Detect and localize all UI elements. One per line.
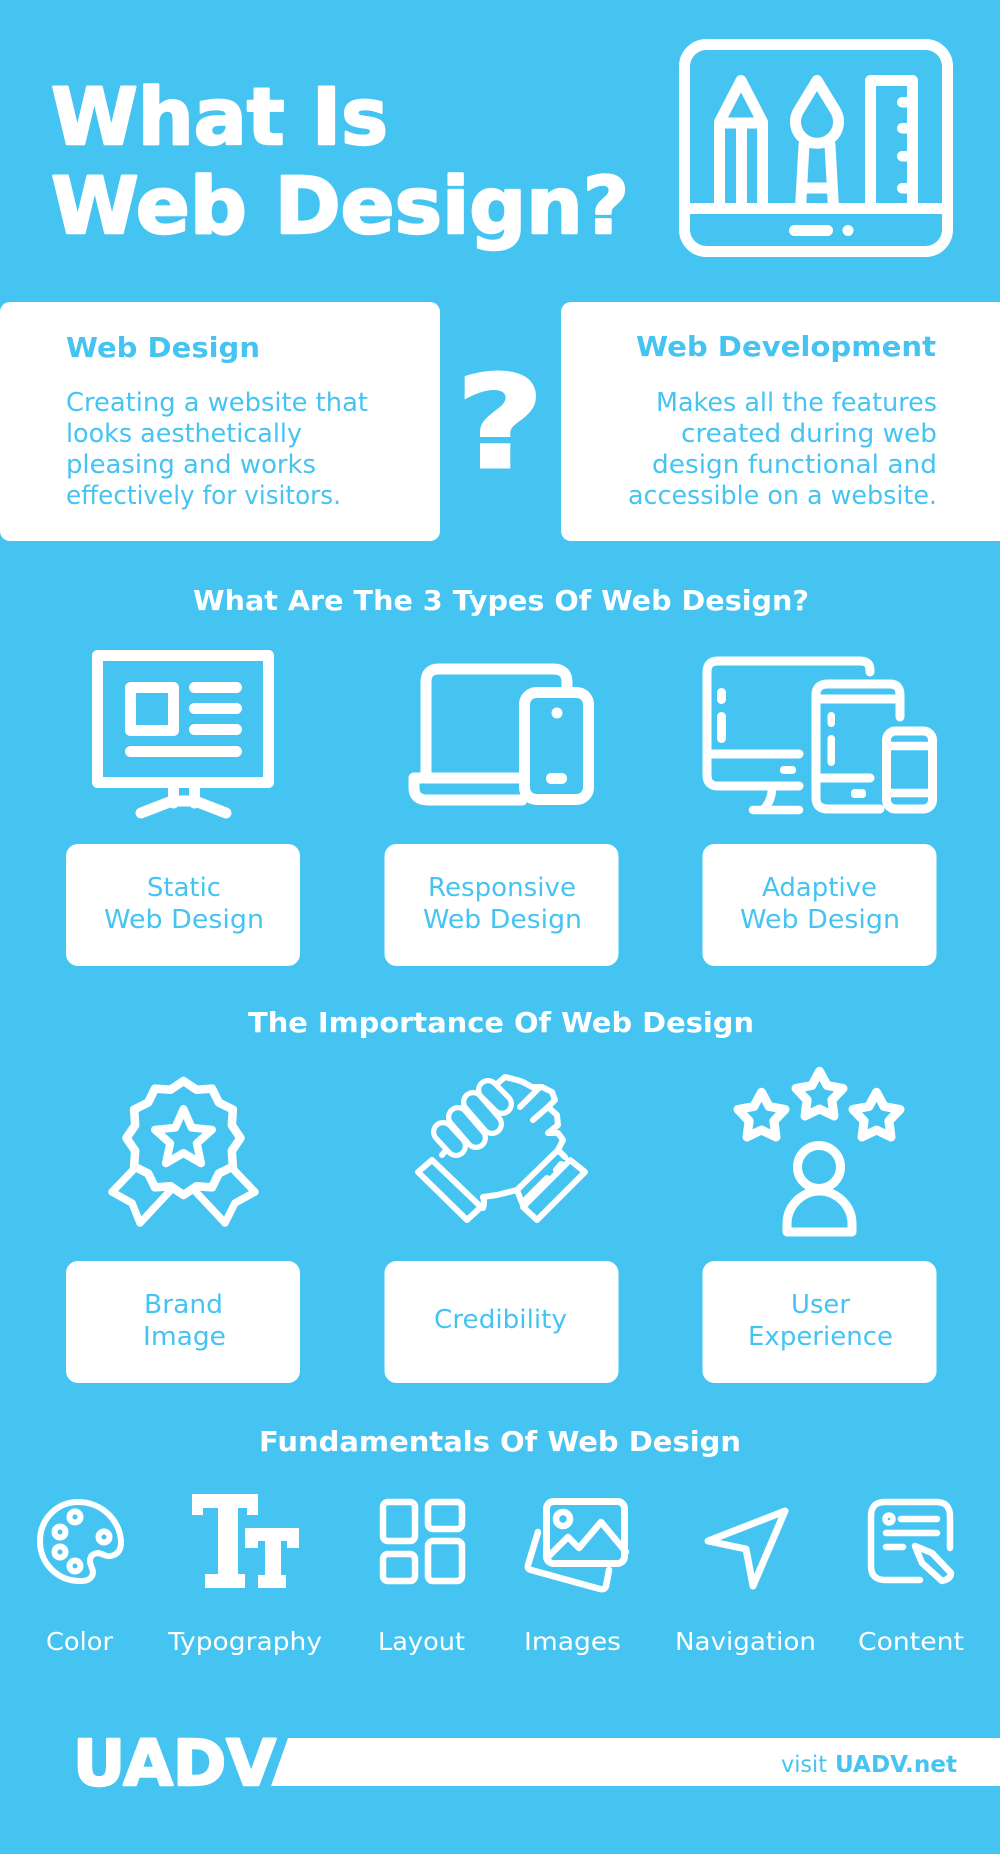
card: user experience: Experience: [748, 1322, 893, 1352]
text: web development description: design functional and: [652, 450, 937, 480]
text: web design description: [66, 388, 368, 511]
text: web design description: looks aesthetically: [66, 419, 302, 449]
text: visit link: [781, 1752, 957, 1778]
text: web development description: accessible on a website.: [628, 481, 937, 511]
heading: types of web design: What Are The 3 Types Of Web Design?: [193, 584, 809, 617]
heading: importance of web design: The Importance Of Web Design: [248, 1006, 754, 1039]
card: static web design: [66, 844, 300, 966]
icon: layout: [383, 1502, 462, 1581]
text: web development description: [628, 388, 937, 511]
question mark: ?: [456, 349, 544, 498]
labels: fundamentals: Color: [46, 1627, 114, 1656]
panel: web development definition: [561, 302, 1000, 541]
logo: UADV: UADV: [73, 1727, 276, 1800]
icon: navigation: [708, 1511, 785, 1586]
card: static web design: Web Design: [104, 905, 264, 935]
icon: award badge: [112, 1081, 255, 1223]
card: responsive web design: Web Design: [423, 905, 582, 935]
labels: fundamentals: [46, 1627, 964, 1656]
footer bar: [73, 1727, 1000, 1800]
text: visit link: UADV.net: [835, 1752, 957, 1778]
card: credibility: Credibility: [434, 1305, 567, 1335]
card: adaptive web design: Adaptive: [762, 873, 877, 903]
labels: fundamentals: Layout: [378, 1627, 465, 1656]
icon: adaptive devices: [707, 661, 932, 810]
card: brand image: [66, 1261, 300, 1383]
heading: fundamentals of web design: Fundamentals Of Web Design: [259, 1425, 741, 1458]
icon: content: [871, 1502, 951, 1581]
card: user experience: [702, 1261, 936, 1383]
icon: responsive laptop and tablet: [414, 669, 588, 800]
card: adaptive web design: [702, 844, 936, 966]
text: visit link: visit: [781, 1752, 827, 1778]
card: user experience: User: [791, 1290, 851, 1320]
title: [51, 73, 629, 252]
card: credibility: [384, 1261, 618, 1383]
labels: fundamentals: Typography: [167, 1627, 322, 1656]
icon: static monitor: [98, 656, 268, 813]
text: web design description: effectively for visitors.: [66, 481, 341, 511]
card: brand image: Image: [143, 1322, 226, 1352]
icon: images: [528, 1502, 626, 1589]
title: Web Design?: [51, 162, 629, 252]
icon: handshake: [418, 1077, 585, 1220]
icon: user with stars: [738, 1071, 900, 1232]
card: responsive web design: [384, 844, 618, 966]
card: brand image: Brand: [144, 1290, 223, 1320]
icon: typography: [192, 1494, 299, 1588]
card: responsive web design: Responsive: [428, 873, 576, 903]
labels: fundamentals: Content: [858, 1627, 964, 1656]
icon: color palette: [40, 1502, 121, 1581]
title: What Is: [51, 73, 388, 163]
text: web development description: created during web: [681, 419, 937, 449]
card: adaptive web design: Web Design: [740, 905, 900, 935]
labels: fundamentals: Images: [524, 1627, 621, 1656]
text: web design description: Creating a website that: [66, 388, 368, 418]
labels: fundamentals: Navigation: [675, 1627, 816, 1656]
text: web development description: Makes all the features: [656, 388, 937, 418]
heading: web design: Web Design: [66, 331, 260, 364]
heading: web development: Web Development: [636, 330, 936, 363]
card: static web design: Static: [147, 873, 221, 903]
icon: design tools on tablet: [684, 44, 948, 252]
panel: web design definition: [0, 302, 440, 541]
text: web design description: pleasing and works: [66, 450, 316, 480]
